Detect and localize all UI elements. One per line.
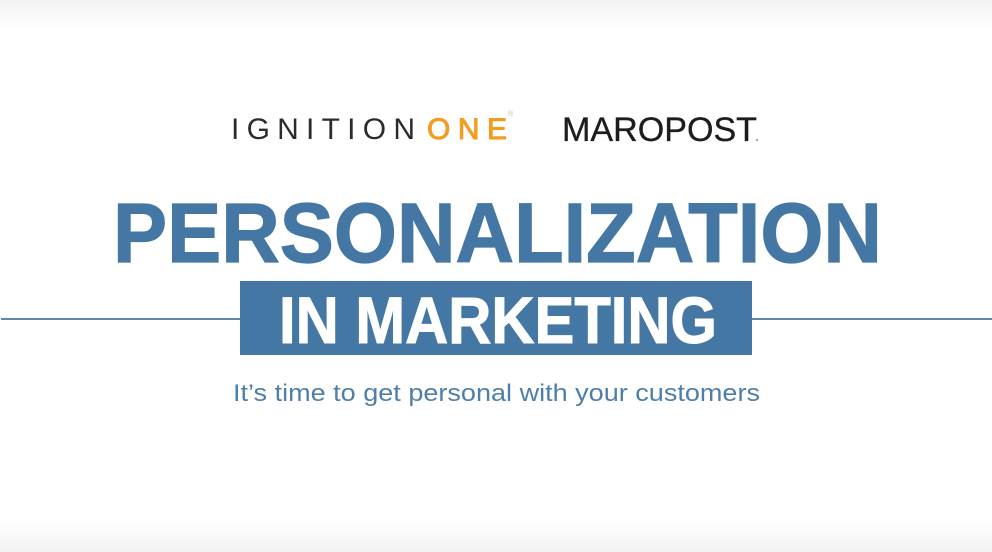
logo: Maropost: MAROPOST	[562, 111, 757, 149]
title: Personalization: PERSONALIZATION	[113, 186, 882, 280]
logo: IgnitionOne: ®	[508, 110, 514, 118]
logo: IgnitionOne	[231, 110, 514, 146]
divider line: right	[751, 318, 992, 320]
subtitle: It’s time to get personal with your customers	[233, 380, 760, 407]
logo: IgnitionOne: ONE	[427, 113, 507, 146]
banner: In Marketing: IN MARKETING	[279, 283, 717, 357]
divider line: left	[1, 318, 241, 320]
logo: IgnitionOne: IGNITION	[231, 113, 415, 146]
